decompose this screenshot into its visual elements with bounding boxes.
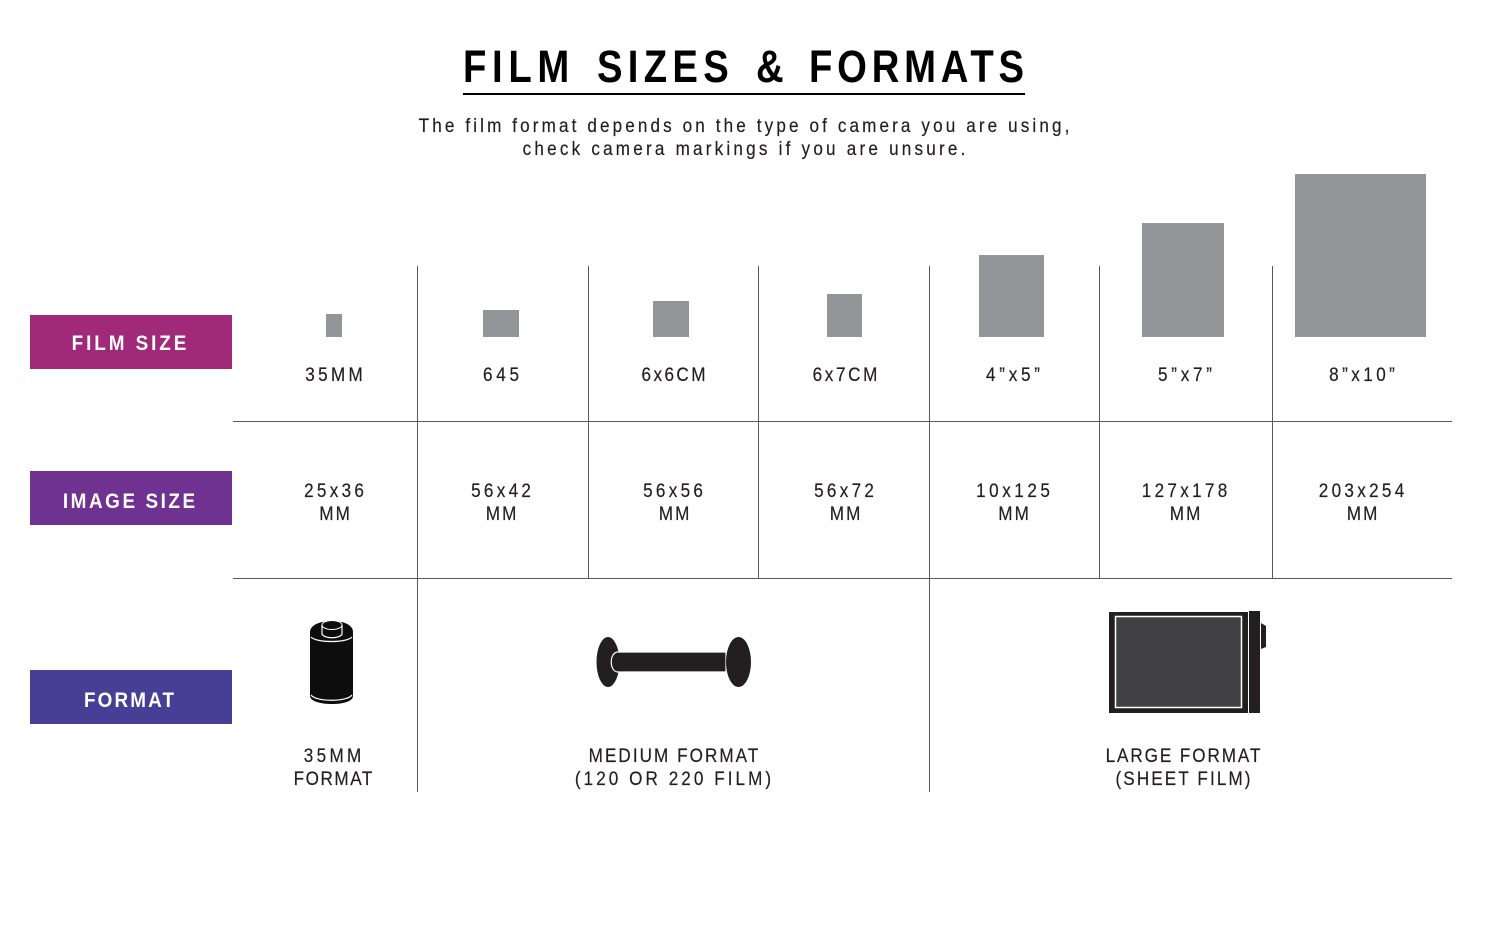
film size: 4x5 <box>979 255 1044 385</box>
label: film size: FILM SIZE <box>72 332 186 355</box>
subtitle <box>419 115 1069 159</box>
title: SIZES <box>597 41 729 92</box>
film size: 6x6cm: 6x6CM <box>642 364 705 385</box>
table grid lines <box>233 266 1452 792</box>
title <box>463 41 1025 95</box>
image size: 10x125 mm: MM <box>998 503 1029 524</box>
format label: medium format <box>575 745 771 789</box>
film size: 35mm: 35MM <box>305 364 363 385</box>
subtitle: The film format depends on the type of camera you are using, <box>419 115 1069 136</box>
image size: 56x56 mm: 56x56 <box>643 480 703 501</box>
icon: large format sheet film holder <box>1109 611 1266 713</box>
film size: 4x5: 4”x5” <box>986 364 1040 385</box>
image size: 25x36 mm: MM <box>319 503 350 524</box>
format label: large format <box>1106 745 1260 789</box>
label: format: FORMAT <box>84 689 174 712</box>
image size: 25x36 mm: 25x36 <box>304 480 364 501</box>
title: FORMATS <box>809 41 1024 92</box>
film size: 645 <box>483 310 519 385</box>
format label: medium format: (120 OR 220 FILM) <box>575 768 771 789</box>
label: image size <box>30 471 232 525</box>
image size: 56x72 mm: MM <box>830 503 860 524</box>
image size: 25x36 mm <box>304 480 364 524</box>
film size: 5x7: 5”x7” <box>1158 364 1212 385</box>
image size: 56x56 mm: MM <box>659 503 689 524</box>
format label: medium format: MEDIUM FORMAT <box>589 745 758 766</box>
image size: 56x42 mm: MM <box>486 503 516 524</box>
title: FILM <box>463 41 569 92</box>
image size: 56x72 mm: 56x72 <box>814 480 874 501</box>
image size: 203x254 mm: MM <box>1347 503 1377 524</box>
image size: 203x254 mm <box>1319 480 1404 524</box>
label: format <box>30 670 232 724</box>
icon: 35mm film canister <box>310 620 353 704</box>
image size: 56x42 mm <box>471 480 531 524</box>
format label: 35mm: FORMAT <box>294 768 372 789</box>
image size: 10x125 mm <box>976 480 1050 524</box>
film size: 645: 645 <box>483 364 519 385</box>
title: & <box>756 41 784 92</box>
image size: 127x178 mm: 127x178 <box>1142 480 1227 501</box>
format label: large format: (SHEET FILM) <box>1115 768 1251 789</box>
icon: medium format film spool <box>596 637 751 687</box>
image size: 56x72 mm <box>814 480 874 524</box>
image size: 56x42 mm: 56x42 <box>471 480 531 501</box>
subtitle: check camera markings if you are unsure. <box>523 138 965 159</box>
label: image size: IMAGE SIZE <box>63 490 195 513</box>
image size: 203x254 mm: 203x254 <box>1319 480 1404 501</box>
format label: 35mm <box>294 745 372 789</box>
film size: 8x10: 8”x10” <box>1329 364 1395 385</box>
label: film size <box>30 315 232 369</box>
film size: 5x7 <box>1142 223 1224 385</box>
format label: large format: LARGE FORMAT <box>1106 745 1260 766</box>
image size: 127x178 mm <box>1142 480 1227 524</box>
format label: 35mm: 35MM <box>304 745 361 766</box>
film size: 35mm <box>305 314 363 385</box>
film size: 6x7cm <box>813 294 877 385</box>
image size: 10x125 mm: 10x125 <box>976 480 1050 501</box>
image size: 127x178 mm: MM <box>1170 503 1200 524</box>
film size: 6x6cm <box>642 301 705 385</box>
image size: 56x56 mm <box>643 480 703 524</box>
film size: 6x7cm: 6x7CM <box>813 364 877 385</box>
film size: 8x10 <box>1295 174 1426 385</box>
